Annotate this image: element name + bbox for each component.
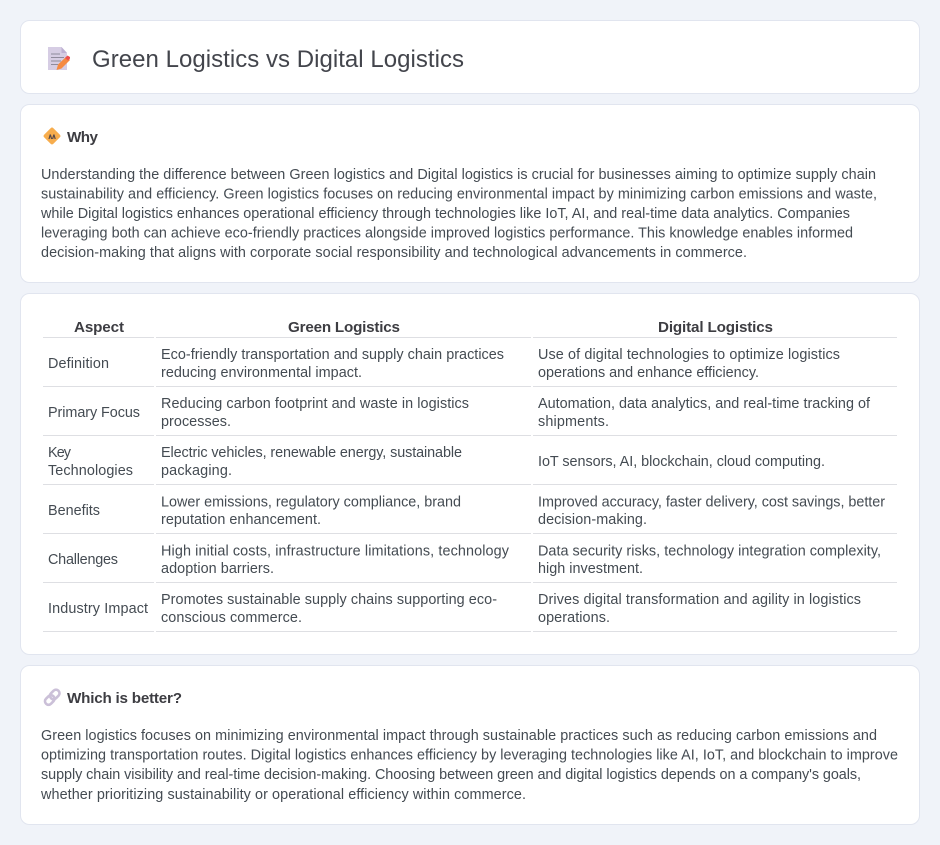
- table header: [74, 319, 773, 336]
- row: primary focus: [48, 396, 871, 430]
- row: primary focus: shipments.: [538, 414, 609, 430]
- panel: why: [20, 104, 920, 282]
- table header: Green Logistics: [288, 319, 400, 336]
- row: key technologies: IoT sensors, AI, blockchain, cloud computing.: [538, 454, 825, 470]
- row: key technologies: Key: [48, 445, 72, 461]
- row: benefits: Improved accuracy, faster delivery, cost savings, better: [538, 494, 885, 510]
- row: definition: operations and enhance efficiency.: [538, 365, 759, 381]
- row: benefits: decision-making.: [538, 512, 647, 528]
- text block: which paragraph: whether prioritizing sustainability or operational efficiency within commerce.: [40, 787, 526, 803]
- row: key technologies: packaging.: [161, 463, 232, 479]
- icon: link: [44, 688, 61, 706]
- row: challenges: Challenges: [48, 552, 118, 568]
- row: challenges: High initial costs, infrastructure limitations, technology: [161, 544, 510, 560]
- panel: which is better: [20, 666, 920, 824]
- row: benefits: Benefits: [48, 503, 100, 519]
- table header: Digital Logistics: [658, 319, 773, 336]
- row: definition: Use of digital technologies to optimize logistics: [538, 347, 840, 363]
- panel: header: [20, 20, 920, 94]
- row: definition: Definition: [48, 356, 109, 372]
- row: primary focus: Reducing carbon footprint and waste in logistics: [161, 396, 469, 412]
- text block: which paragraph: supply chain visibility and real-time decision-making. Choosing between green and digital logistics depends on a company's goals,: [41, 767, 861, 783]
- row: industry impact: Drives digital transformation and agility in logistics: [538, 592, 861, 608]
- panel: comparison table: [20, 294, 920, 654]
- row: industry impact: operations.: [538, 610, 610, 626]
- row: key technologies: Technologies: [48, 463, 133, 479]
- icon: diamond warning sign: [43, 127, 61, 145]
- row: benefits: Lower emissions, regulatory compliance, brand: [161, 494, 461, 510]
- text block: why paragraph: leveraging both can achieve eco-friendly practices alongside improved logistics performance. This knowledge enables informed: [41, 226, 853, 242]
- row: definition: reducing environmental impact.: [161, 365, 362, 381]
- text block: why paragraph: [40, 167, 877, 261]
- title: Green Logistics vs Digital Logistics: [92, 46, 464, 73]
- heading: why: Why: [67, 129, 99, 146]
- text block: why paragraph: while Digital logistics enhances operational efficiency through technologies like IoT, AI, and real-time data analytics. Companies: [40, 206, 850, 222]
- text block: which paragraph: Green logistics focuses on minimizing environmental impact through sustainable practices such as reducing carbon emissions and: [41, 728, 877, 744]
- row: benefits: reputation enhancement.: [161, 512, 321, 528]
- row: industry impact: conscious commerce.: [161, 610, 302, 626]
- row: primary focus: Automation, data analytics, and real-time tracking of: [538, 396, 871, 412]
- row: primary focus: Primary Focus: [48, 405, 140, 421]
- row: definition: Eco-friendly transportation and supply chain practices: [161, 347, 504, 363]
- heading: which is better: Which is better?: [67, 690, 182, 707]
- row: industry impact: [48, 592, 861, 626]
- row: challenges: Data security risks, technology integration complexity,: [538, 544, 881, 560]
- icon: memo with pencil: [48, 47, 70, 70]
- row: challenges: high investment.: [538, 561, 643, 577]
- row: challenges: adoption barriers.: [161, 561, 274, 577]
- row: primary focus: processes.: [161, 414, 231, 430]
- row: key technologies: Electric vehicles, renewable energy, sustainable: [161, 445, 462, 461]
- row: industry impact: Promotes sustainable supply chains supporting eco-: [161, 592, 497, 608]
- table header: Aspect: [74, 319, 124, 336]
- text block: why paragraph: Understanding the difference between Green logistics and Digital logistics is crucial for businesses aiming to optimize supply chain: [41, 167, 876, 183]
- row: industry impact: Industry Impact: [48, 601, 148, 617]
- text block: which paragraph: optimizing transportation routes. Digital logistics enhances efficiency by leveraging technologies like AI, IoT, and blockchain to improve: [41, 748, 898, 764]
- row: benefits: [48, 494, 885, 528]
- row: key technologies: [48, 445, 825, 479]
- row: challenges: [48, 544, 881, 577]
- row: definition: [48, 347, 840, 381]
- text block: why paragraph: sustainability and efficiency. Green logistics focuses on reducing environmental impact by minimizing carbon emissions and waste,: [41, 186, 877, 202]
- text block: why paragraph: decision-making that aligns with corporate social responsibility and technological advancements in commerce.: [41, 245, 747, 261]
- text block: which paragraph: [40, 728, 898, 803]
